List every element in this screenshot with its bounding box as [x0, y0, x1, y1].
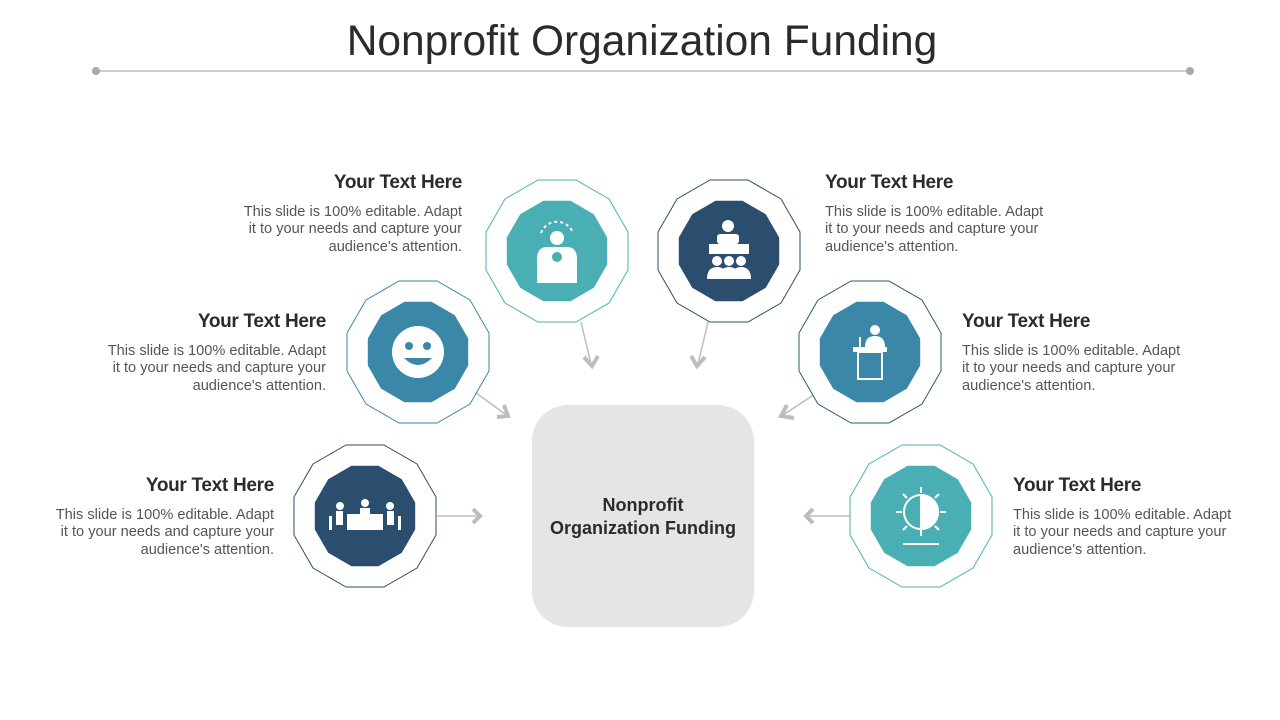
title divider — [92, 67, 1194, 75]
text: mid-left: Your Text Here — [198, 311, 326, 332]
text: bottom-right: it to your needs and capture your — [1013, 524, 1227, 540]
text: mid-left: This slide is 100% editable. Adapt — [108, 343, 326, 359]
icon: smiley — [392, 326, 444, 378]
text: bottom-left: This slide is 100% editable. Adapt — [56, 507, 274, 523]
center box: Nonprofit — [603, 495, 683, 515]
text: mid-right — [962, 311, 1180, 394]
node: top-right (navy) — [658, 180, 800, 322]
text: bottom-right: Your Text Here — [1013, 475, 1141, 496]
text: mid-left: it to your needs and capture your — [113, 360, 326, 376]
title: Nonprofit Organization Funding — [347, 18, 937, 65]
text: top-right: audience's attention. — [825, 239, 958, 255]
icon: person with star — [537, 222, 577, 283]
node: bottom-left (navy) — [294, 445, 436, 587]
text: mid-right: it to your needs and capture your — [962, 360, 1176, 376]
text: bottom-left — [56, 475, 274, 558]
text: bottom-left: audience's attention. — [141, 542, 274, 558]
text: top-right: This slide is 100% editable. Adapt — [825, 204, 1043, 220]
arrow heads — [473, 356, 813, 523]
text: bottom-left: it to your needs and capture your — [61, 524, 274, 540]
text: mid-right: audience's attention. — [962, 378, 1095, 394]
icon: podium — [853, 325, 887, 379]
text: bottom-right: audience's attention. — [1013, 542, 1146, 558]
text: top-left: This slide is 100% editable. Adapt — [244, 204, 462, 220]
text: mid-left: audience's attention. — [193, 378, 326, 394]
center box — [532, 405, 754, 627]
text: top-right: Your Text Here — [825, 172, 953, 193]
text: bottom-left: Your Text Here — [146, 475, 274, 496]
node: mid-left (blue) — [347, 281, 489, 423]
icon: speaker with audience — [707, 220, 751, 279]
arrows — [437, 322, 851, 516]
node: top-left (teal) — [486, 180, 628, 322]
text: mid-left — [108, 311, 326, 394]
text: top-left: it to your needs and capture your — [249, 221, 462, 237]
text: mid-right: This slide is 100% editable. Adapt — [962, 343, 1180, 359]
text: bottom-right: This slide is 100% editable. Adapt — [1013, 507, 1231, 523]
text: top-right — [825, 172, 1043, 255]
icon: meeting table — [329, 499, 401, 530]
icon: contrast dial — [896, 487, 946, 544]
node: mid-right (blue) — [799, 281, 941, 423]
text: bottom-right — [1013, 475, 1231, 558]
center box: Organization Funding — [550, 518, 736, 538]
text: top-left — [244, 172, 462, 255]
text: top-left: Your Text Here — [334, 172, 462, 193]
node: bottom-right (teal) — [850, 445, 992, 587]
text: top-left: audience's attention. — [329, 239, 462, 255]
text: top-right: it to your needs and capture your — [825, 221, 1039, 237]
text: mid-right: Your Text Here — [962, 311, 1090, 332]
